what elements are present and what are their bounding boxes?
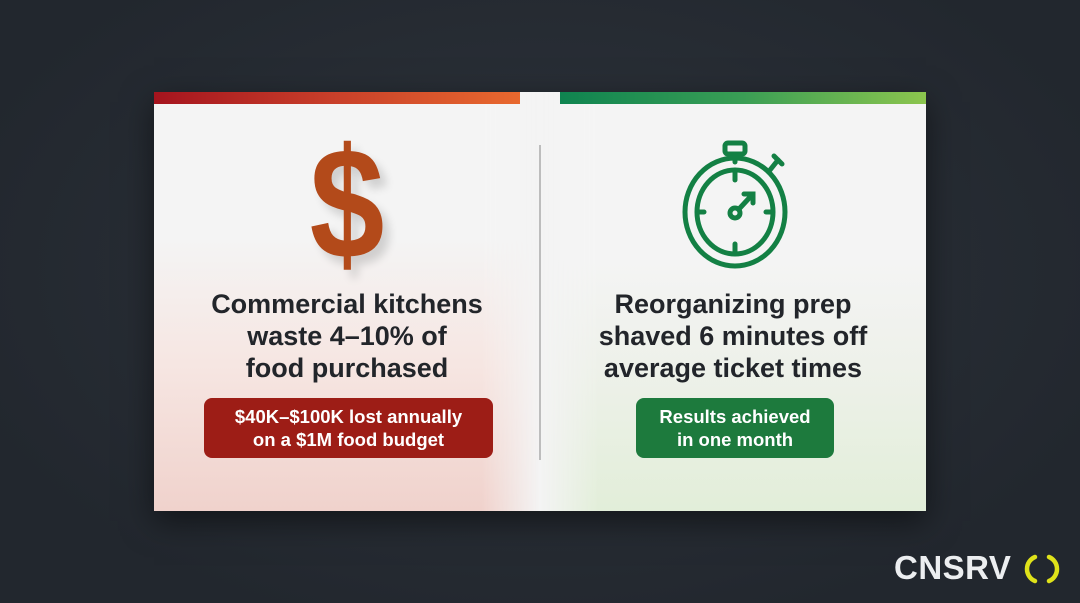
divider [539,145,541,460]
right pill: Results achieved [659,406,811,427]
left pill: $40K–$100K lost annually [235,406,462,427]
left headline: food purchased [246,353,448,383]
right headline: average ticket times [604,353,862,383]
icon: stopwatch [682,140,788,268]
card [154,92,926,511]
green top bar [560,92,926,104]
logo: CNSRV [894,549,1011,586]
icon: yellow ring [1024,554,1060,584]
red top bar [154,92,520,104]
right headline: Reorganizing prep [614,289,852,319]
left headline: waste 4–10% of [247,321,447,351]
icon: dollar: $ [310,116,384,292]
right pill: in one month [677,429,793,450]
right panel background [558,344,926,511]
left pill [204,398,493,458]
right headline [599,289,868,383]
right pill [636,398,834,458]
right headline: shaved 6 minutes off [599,321,867,351]
left headline: Commercial kitchens [211,289,483,319]
left pill: on a $1M food budget [253,429,444,450]
left panel background [154,295,528,511]
left headline [211,289,483,383]
